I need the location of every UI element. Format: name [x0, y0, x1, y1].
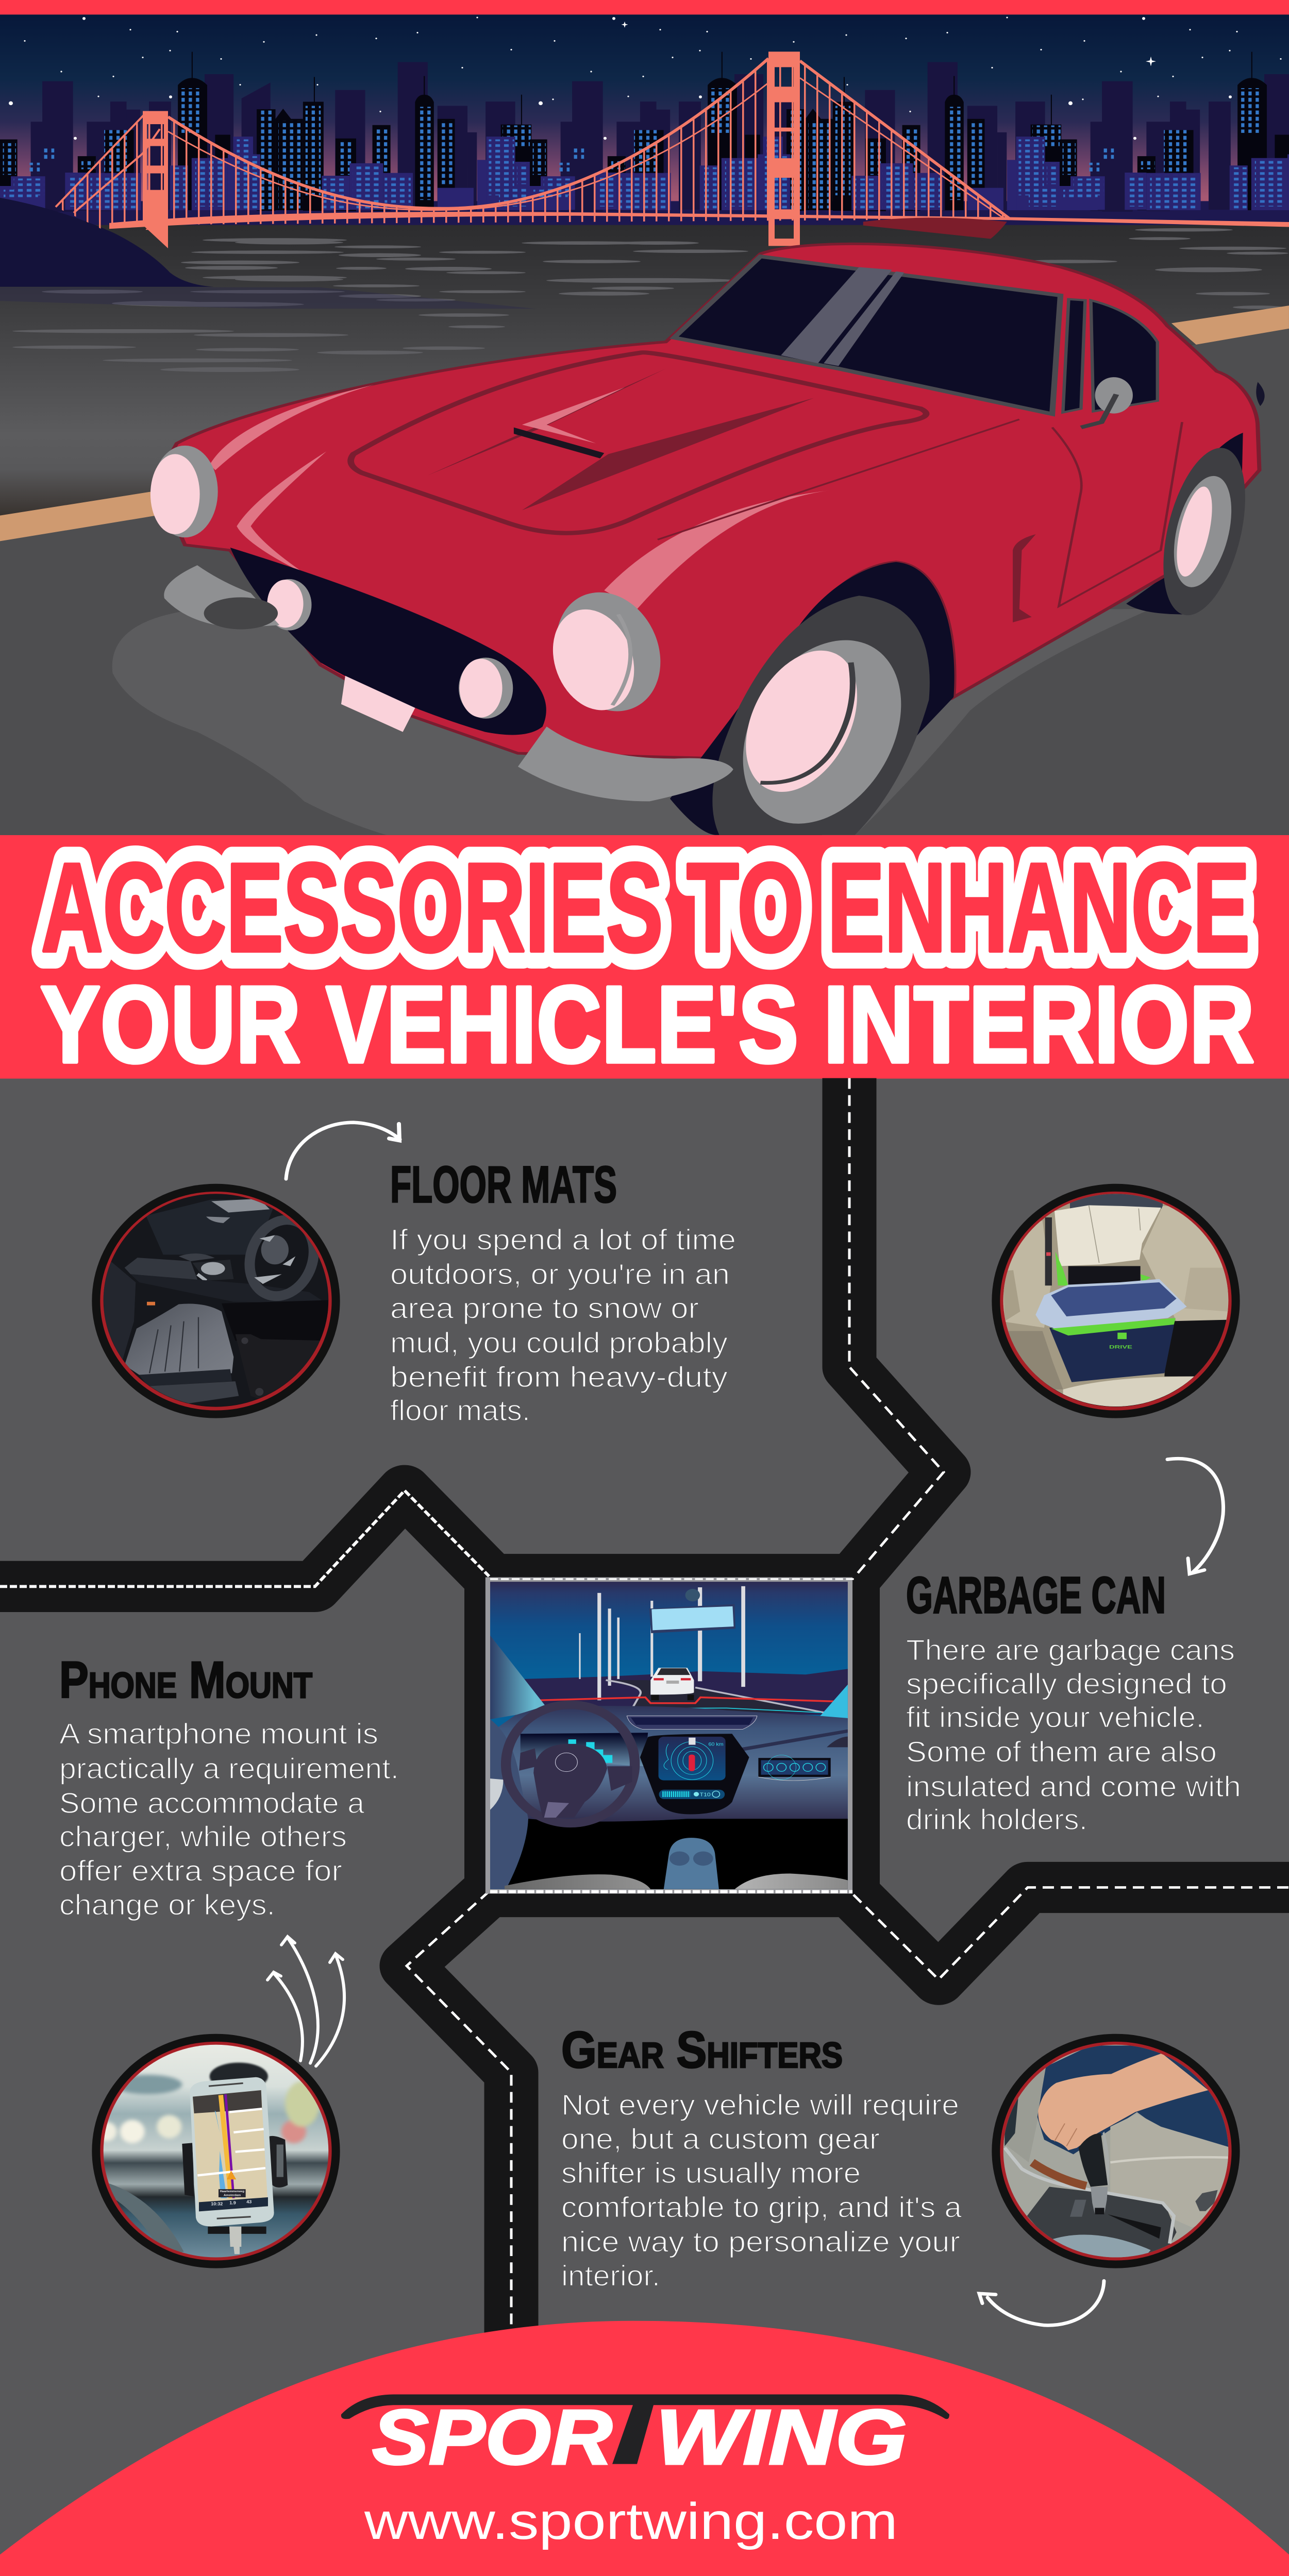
route lines [221, 2095, 231, 2198]
website url: www.sportwing.com [364, 2493, 898, 2550]
island [0, 198, 214, 287]
text: floor mats: area prone to snow or [390, 1292, 699, 1325]
bag body [1049, 1321, 1175, 1382]
front wheel [670, 562, 955, 835]
text: garbage can: insulated and come with [906, 1770, 1241, 1803]
right bumper [518, 726, 733, 801]
text: gear shifters [561, 2089, 962, 2292]
text: phone mount: change or keys. [59, 1889, 275, 1921]
side seat bolster [102, 1261, 136, 1362]
arrows: phone mount [267, 1937, 344, 2066]
central road block [464, 1554, 880, 1917]
right display [758, 1755, 831, 1781]
arrow: gear shifters [979, 2281, 1104, 2325]
logo wordmark: SPOR [372, 2394, 612, 2481]
text: garbage can: Some of them are also [906, 1736, 1217, 1768]
phone mount photo: Amsterdam [224, 2194, 241, 2197]
text: phone mount [59, 1718, 399, 1921]
console strip [659, 1790, 725, 1799]
seat bracket [1195, 2190, 1218, 2211]
side windows [1063, 299, 1158, 413]
text: phone mount: offer extra space for [59, 1855, 342, 1887]
right pillar [820, 1685, 848, 1718]
arrow: floor mats [286, 1123, 400, 1179]
suction cup [210, 2062, 268, 2090]
seats [505, 1874, 848, 1889]
text: floor mats: If you spend a lot of time [390, 1224, 736, 1256]
floor mat [236, 1334, 320, 1373]
night sky [0, 14, 1289, 229]
rear wheel underside [1126, 574, 1184, 614]
text: garbage can: drink holders. [906, 1804, 1087, 1836]
phone status bar [199, 2197, 268, 2211]
text: garbage can: fit inside your vehicle. [906, 1701, 1204, 1734]
text: gear shifters: Not every vehicle will require [561, 2089, 959, 2122]
brand label: DRIVE [1109, 1345, 1133, 1350]
centre headrest [1054, 1205, 1161, 1266]
door panel [146, 1199, 277, 1255]
streak [738, 1730, 848, 1751]
phone [190, 2077, 274, 2227]
text: floor mats: mud, you could probably [390, 1327, 728, 1359]
text: gear shifters: one, but a custom gear [561, 2123, 880, 2156]
road [0, 329, 1289, 836]
gear shifter photo [992, 2034, 1240, 2268]
side vent [827, 1736, 848, 1747]
overhead sign [649, 1589, 735, 1633]
left pillar [490, 1635, 545, 1719]
grille [230, 548, 546, 735]
road network [0, 1078, 1289, 2347]
tail light [1256, 382, 1265, 406]
body highlights [210, 385, 830, 609]
text: gear shifters: interior. [561, 2260, 660, 2292]
hero illustration: night city and red car [0, 0, 1289, 836]
dashboard [490, 1706, 848, 1823]
gear knob [1079, 2133, 1108, 2187]
footwell [506, 1819, 848, 1889]
city skyline [0, 52, 1289, 226]
road centre dashes [0, 1078, 1289, 2347]
text: floor mats: floor mats. [390, 1395, 530, 1427]
seat belt [1045, 1217, 1052, 1285]
text: phone mount: A smartphone mount is [59, 1718, 378, 1750]
bottom seat [1063, 1377, 1194, 1409]
text: gear shifters: nice way to personalize your [561, 2226, 960, 2258]
hood scoop [427, 369, 814, 510]
footer dome [0, 2321, 1289, 2576]
rear floor [1070, 1194, 1163, 1209]
text: floor mats: benefit from heavy-duty [390, 1361, 728, 1394]
blurred bokeh lights [96, 2075, 320, 2143]
heading: phone mount: Phone Mount [59, 1651, 312, 1708]
fog lights [267, 579, 513, 719]
seat [1110, 2114, 1231, 2227]
door lines [658, 419, 1182, 606]
forearm and hand [1038, 2054, 1208, 2150]
water and far ground [0, 225, 1289, 517]
text: gear shifters: comfortable to grip, and it's a [561, 2191, 962, 2224]
sky [490, 1582, 848, 1889]
text: garbage can: There are garbage cans [906, 1634, 1235, 1667]
text: floor mats [390, 1224, 736, 1427]
top dashes on frame [490, 1577, 855, 1581]
hills [522, 1669, 848, 1715]
phone mount photo: 10:32 [211, 2201, 223, 2207]
stars [9, 17, 1289, 140]
rear wheel [1150, 433, 1259, 619]
phone mount photo: 43 [246, 2199, 252, 2205]
text: garbage can [906, 1634, 1241, 1836]
title banner [0, 835, 1289, 1086]
floor mat dark [1164, 1319, 1231, 1377]
text: phone mount: Some accommodate a [59, 1787, 365, 1820]
console [1027, 2187, 1177, 2257]
green band [1051, 1318, 1176, 1339]
steering wheel rim [105, 2183, 184, 2257]
phone mount photo: 1.9 [229, 2200, 236, 2205]
shoreline haze [0, 287, 536, 309]
text: floor mats: outdoors, or you're in an [390, 1258, 730, 1291]
seat [125, 1304, 233, 1375]
jeans [1037, 2045, 1231, 2154]
phone screen [193, 2090, 268, 2211]
road stripes [0, 306, 1289, 541]
usb cable [229, 2227, 241, 2254]
windshield reflections [781, 267, 904, 366]
text: phone mount: charger, while others [59, 1821, 347, 1853]
water ripples [12, 228, 1288, 372]
instrument display [521, 1733, 648, 1766]
orange seat tag [147, 1302, 155, 1306]
road ahead [606, 1680, 824, 1713]
gear tunnel [664, 1838, 719, 1889]
wing mirror [1081, 377, 1133, 428]
navigation screen [659, 1737, 726, 1781]
car and road, drawn in 1.595 x 1.097 space [0, 218, 1289, 836]
logo wordmark: WING [656, 2394, 907, 2481]
centre console [640, 1734, 749, 1815]
title line 1 white outline [41, 837, 1250, 978]
left seat [1001, 1221, 1051, 1328]
image frame [486, 1577, 852, 1894]
floor mats photo [92, 1184, 340, 1418]
navigation screen: 60 km [708, 1742, 724, 1747]
right seat [1142, 1206, 1231, 1321]
black carpet [222, 1300, 328, 1341]
phone street label [219, 2189, 246, 2197]
red hud line [539, 1698, 834, 1703]
roof shadow [863, 218, 1007, 239]
centre console [125, 1258, 197, 1280]
text: phone mount: practically a requirement. [59, 1752, 399, 1785]
arrow: garbage can [1167, 1459, 1223, 1574]
golden-gate style bridge [52, 49, 1289, 248]
central dashboard illustration [486, 1577, 855, 1894]
chrome shaft [1091, 2187, 1108, 2214]
heading: gear shifters: Gear Shifters [561, 2021, 843, 2079]
top red bar [0, 0, 1289, 14]
road surface [0, 1078, 1289, 2347]
cyan hud line [624, 1708, 822, 1713]
car ahead [650, 1668, 694, 1700]
text: gear shifters: shifter is usually more [561, 2157, 861, 2190]
lane markings [606, 1680, 824, 1713]
bag liner [1035, 1279, 1187, 1329]
phone mount photo: Haarlemmerweg [220, 2190, 244, 2193]
bottom dashes on frame [490, 1888, 852, 1895]
air vents [627, 1716, 757, 1730]
car body [156, 244, 1260, 758]
logo bar [341, 2394, 949, 2464]
logo [341, 2394, 949, 2481]
clamp arms [182, 2143, 194, 2196]
right headlight [544, 588, 672, 716]
street lamps [579, 1586, 745, 1700]
lower left trim [490, 1719, 528, 1889]
door handle [1013, 534, 1036, 622]
left trim [1001, 2062, 1046, 2162]
heading: floor mats: FLOOR MATS [390, 1156, 617, 1213]
garbage can photo [992, 1184, 1240, 1418]
steering wheel [506, 1705, 635, 1823]
steering wheel [244, 1215, 319, 1301]
phone mount photo [92, 2034, 340, 2268]
car shadow [112, 609, 1151, 835]
console strip: T10 [700, 1792, 711, 1798]
logo wordmark [372, 2394, 907, 2481]
left bumper [164, 565, 279, 630]
windshield [674, 257, 1061, 414]
left headlight [150, 446, 218, 537]
strap and back panel [1068, 1266, 1141, 1285]
hood panel [351, 352, 926, 533]
number plate [341, 676, 415, 732]
text: garbage can: specifically designed to [906, 1668, 1227, 1700]
